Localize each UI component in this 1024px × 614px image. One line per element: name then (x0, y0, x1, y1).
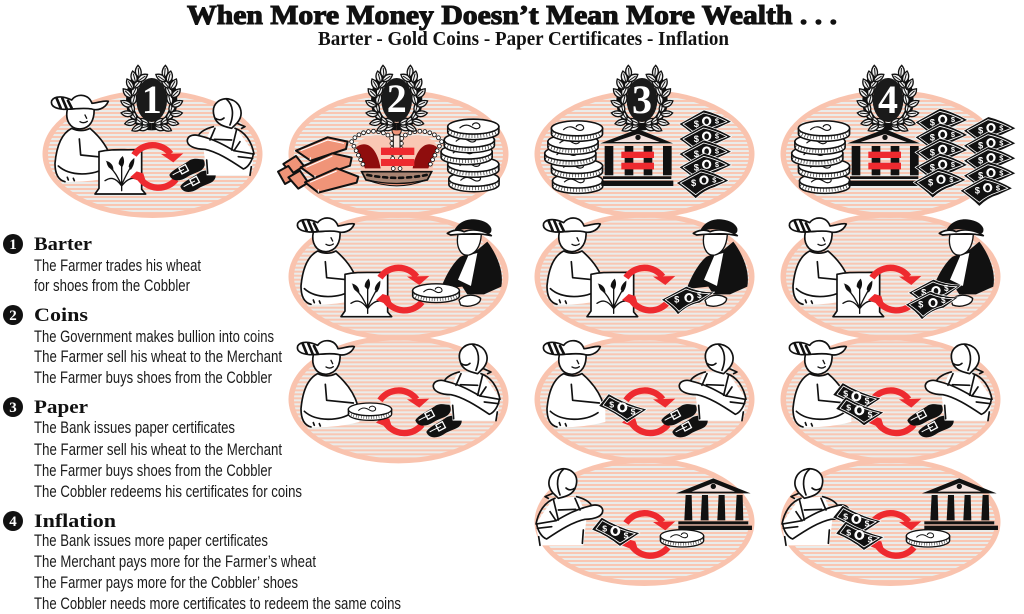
legend: barter: 1 (9, 237, 17, 253)
panel: column 4 row 4 scene (780, 458, 1000, 586)
legend: coins: The Farmer buys shoes from the Cobbler (34, 369, 272, 387)
legend: coins: 2 (9, 308, 17, 324)
icon: coin stack (792, 121, 850, 193)
legend: coins: The Farmer sell his wheat to the Merchant (34, 348, 282, 366)
number 1: 1 (142, 77, 162, 122)
legend: inflation: 4 (9, 514, 17, 530)
panel: inflation scene (780, 65, 1016, 218)
panel: legend text (3, 234, 401, 613)
panel: paper scene (534, 65, 754, 218)
number 4: 4 (878, 77, 898, 122)
legend: paper: Paper (34, 397, 89, 418)
legend: inflation: The Bank issues more paper certificates (34, 532, 268, 550)
title: When More Money Doesn’t Mean More Wealth . . . (187, 0, 837, 30)
legend: inflation: Inflation (34, 511, 116, 532)
icon: paper bills (676, 110, 732, 199)
legend: coins (3, 305, 282, 387)
legend: coins: Coins (34, 305, 88, 326)
panel: column 3 row 2 scene (534, 213, 754, 341)
legend: inflation: The Merchant pays more for the Farmer’s wheat (34, 553, 316, 571)
subtitle: Barter - Gold Coins - Paper Certificates - Inflation (318, 28, 730, 50)
panel: barter scene (42, 65, 262, 218)
panel: coins scene (278, 65, 508, 218)
panel: column 2 row 2 scene (288, 213, 508, 341)
icon: bank (600, 129, 673, 186)
legend: barter: for shoes from the Cobbler (34, 277, 190, 295)
panel: column 3 row 3 scene (534, 335, 754, 463)
legend: inflation (3, 511, 401, 613)
legend: paper (3, 397, 302, 501)
legend: paper: The Farmer sell his wheat to the Merchant (34, 441, 282, 459)
legend: paper: The Cobbler redeems his certificates for coins (34, 483, 302, 501)
panel: column 2 row 3 scene (288, 335, 508, 463)
legend: paper: The Bank issues paper certificates (34, 419, 235, 437)
panel: column 3 row 4 scene (534, 458, 754, 586)
legend: paper: 3 (9, 400, 17, 416)
icon: many paper bills (913, 108, 1016, 206)
legend: inflation: The Farmer pays more for the Cobbler’ shoes (34, 574, 298, 592)
panel: column 4 row 3 scene (780, 335, 1000, 463)
number 3: 3 (632, 77, 652, 122)
number 2: 2 (387, 76, 407, 121)
icon: gold bars (278, 137, 358, 193)
legend: barter: Barter (34, 234, 93, 255)
icon: coin stack (545, 121, 603, 193)
legend: barter: The Farmer trades his wheat (34, 257, 201, 275)
icon: coin stack (441, 119, 499, 192)
panel: column 4 row 2 scene (780, 213, 1000, 341)
legend: coins: The Government makes bullion into coins (34, 328, 274, 346)
legend: barter (3, 234, 201, 295)
legend: inflation: The Cobbler needs more certificates to redeem the same coins (34, 595, 401, 613)
icon: bank (847, 129, 920, 186)
legend: paper: The Farmer buys shoes from the Cobbler (34, 462, 272, 480)
icon: crown (352, 107, 442, 186)
